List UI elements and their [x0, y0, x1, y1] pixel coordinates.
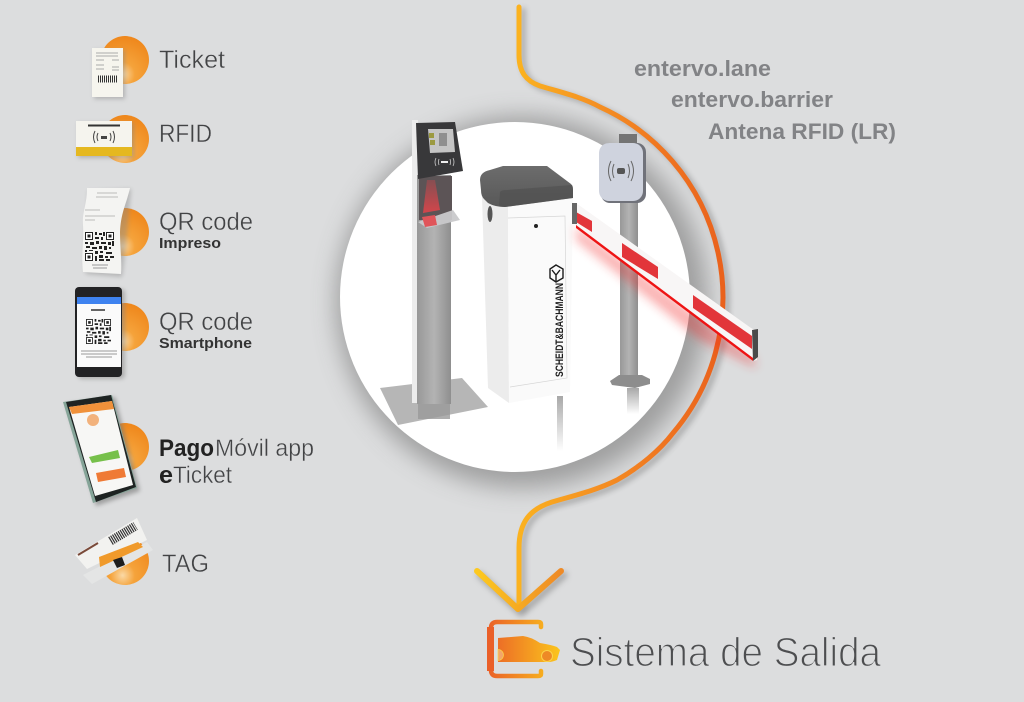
antenna RFID post [599, 134, 650, 388]
white circle stage [340, 122, 690, 472]
item: QR code smartphone [75, 287, 253, 379]
cabinet brand text: SCHEIDT&BACHMANN [554, 283, 566, 377]
label: entervo.barrier: entervo.barrier [671, 87, 833, 112]
item: PagoMóvil app: Móvil app [215, 435, 314, 462]
logo and title: Sistema de Salida [487, 622, 881, 676]
barrier boom [572, 203, 758, 368]
item: QR code smartphone: QR code [159, 308, 253, 336]
top right labels [634, 56, 896, 144]
item: TAG: TAG [162, 550, 209, 578]
item: TAG [75, 518, 209, 585]
item: PagoMóvil app [63, 395, 314, 506]
barrier cabinet: entervo.barrier [480, 166, 573, 403]
item: QR code printed [82, 188, 253, 277]
label: Antena RFID: Antena RFID (LR) [708, 119, 896, 144]
item: PagoMóvil app: Pago [159, 435, 214, 462]
label: entervo.lane: entervo.lane [634, 56, 771, 81]
circle shadow [336, 116, 708, 488]
item: QR code printed: QR code [159, 208, 253, 236]
item: PagoMóvil app: Ticket [173, 462, 232, 489]
cabinet brand mark [550, 265, 563, 282]
orange path arrow [477, 7, 727, 613]
item: QR code printed: Impreso [159, 236, 221, 252]
item: PagoMóvil app: e [159, 462, 173, 489]
kiosk: entervo.lane [380, 120, 488, 425]
item: RFID: RFID [159, 120, 212, 148]
item: RFID [76, 115, 212, 163]
title: Sistema de Salida [570, 629, 881, 675]
floor reflections [557, 388, 639, 451]
item: QR code smartphone: Smartphone [159, 336, 252, 352]
item: Ticket [92, 36, 225, 99]
icon: car in bracket [487, 622, 560, 676]
item: Ticket: Ticket [159, 46, 225, 74]
